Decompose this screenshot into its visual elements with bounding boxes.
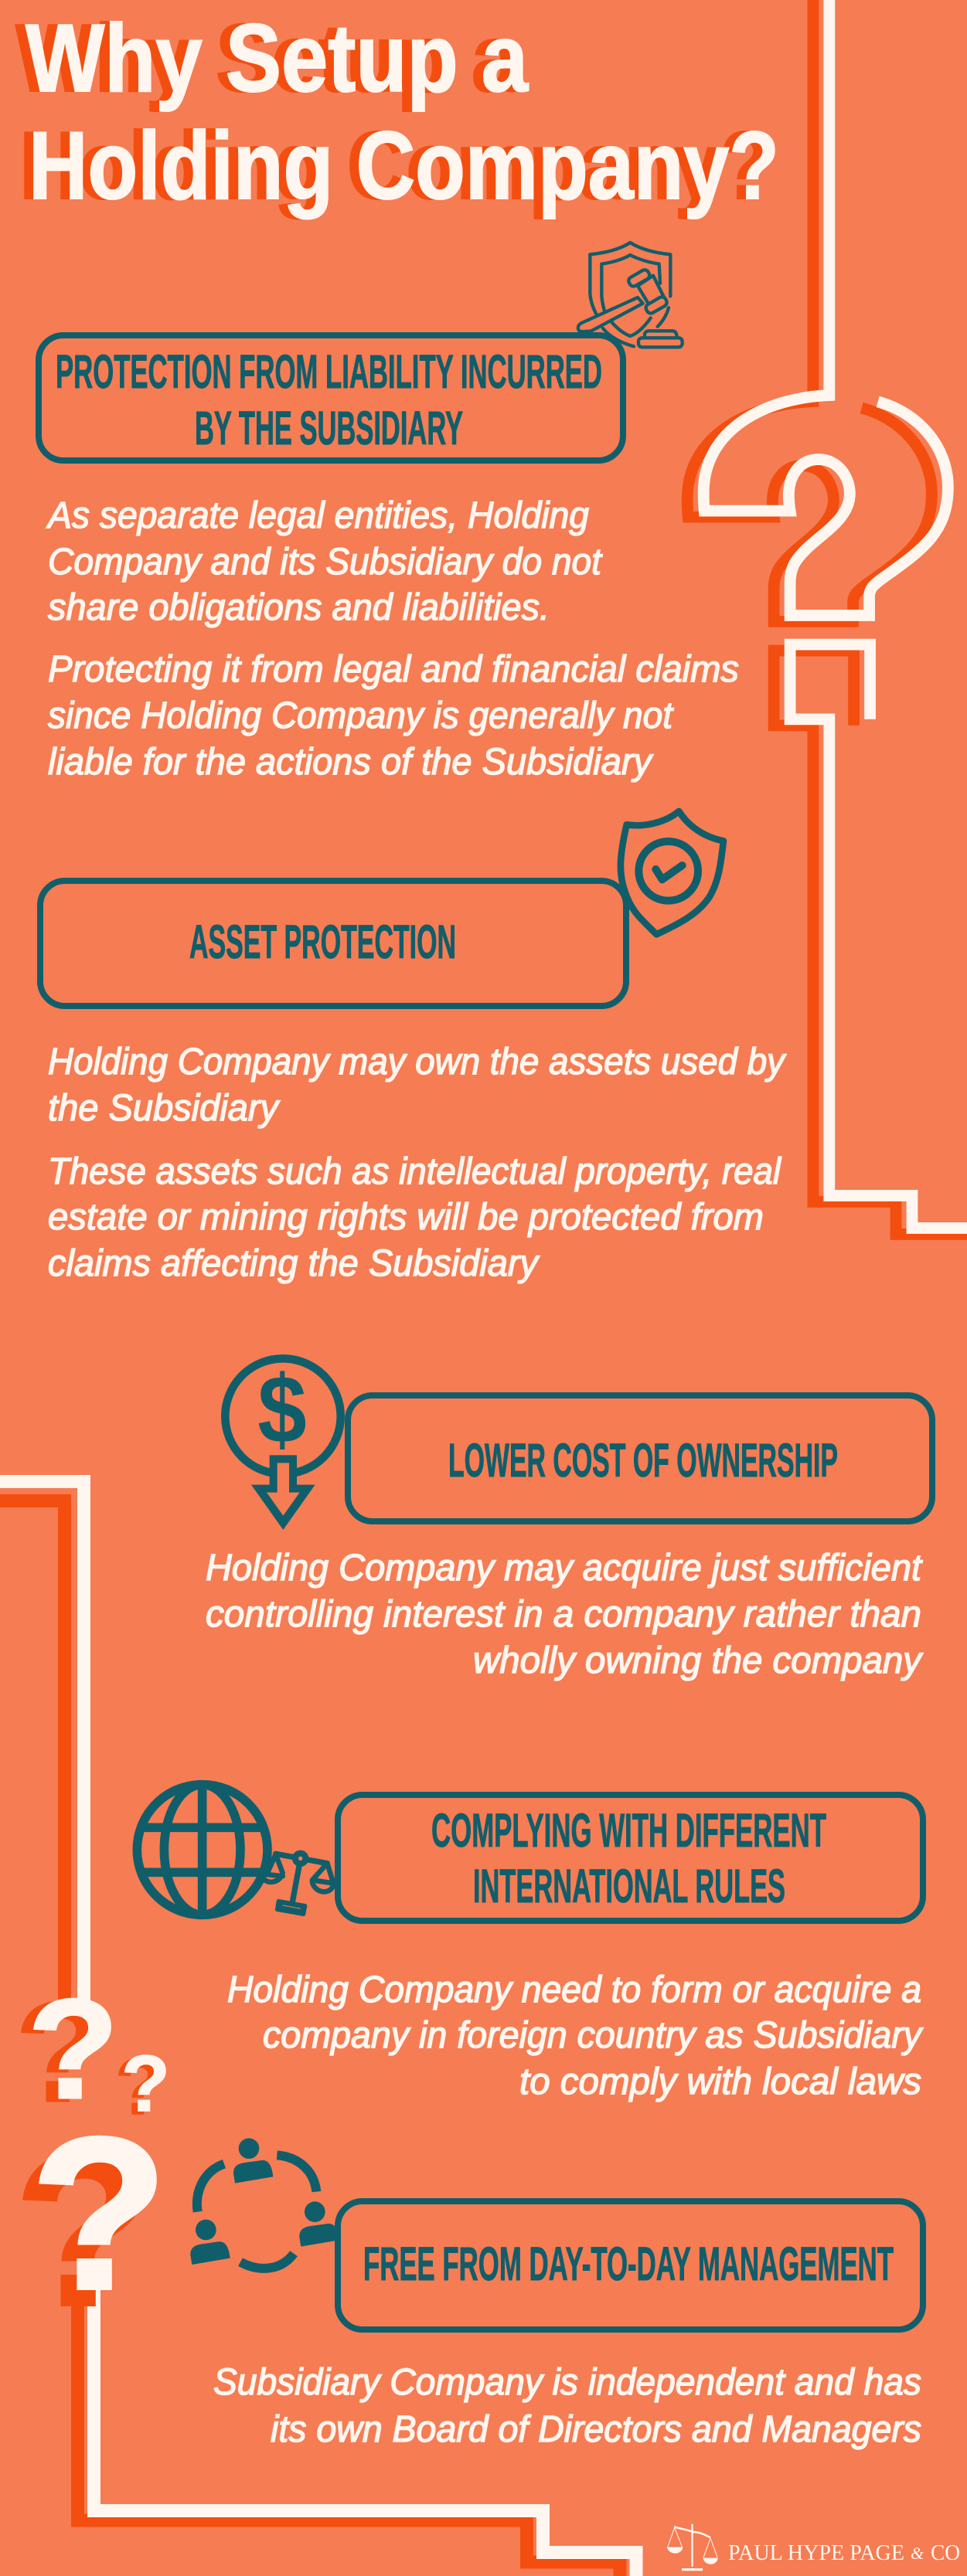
panel: complying with different international rules xyxy=(137,1785,924,2102)
text block: to comply with local laws xyxy=(519,2061,921,2102)
icon: large question mark: ? xyxy=(30,2092,169,2335)
title: Holding Company? xyxy=(19,113,770,219)
heading: ASSET PROTECTION xyxy=(189,916,456,968)
text block xyxy=(227,1969,924,2102)
icon: small question mark: ? xyxy=(121,2039,170,2128)
heading box xyxy=(338,2201,923,2330)
icon: three people in a circle xyxy=(190,2138,339,2268)
heading box xyxy=(348,1395,932,1521)
icon: small question mark: ? xyxy=(115,2042,164,2131)
text block: As separate legal entities, Holding xyxy=(46,495,589,536)
text block: share obligations and liabilities. xyxy=(48,587,550,628)
text block: These assets such as intellectual property, real xyxy=(48,1151,781,1192)
company name: PAUL HYPE PAGE xyxy=(728,2541,904,2565)
logo: Paul Hype Page & Co xyxy=(668,2524,960,2570)
heading box xyxy=(39,335,623,460)
text block: liable for the actions of the Subsidiary xyxy=(48,742,654,783)
icon: dollar coin with down arrow: $ xyxy=(257,1357,307,1463)
heading box xyxy=(338,1795,923,1921)
text block: Subsidiary Company is independent and has xyxy=(213,2362,921,2403)
text block: controlling interest in a company rather than xyxy=(206,1594,921,1635)
icon: shield with check xyxy=(621,811,724,934)
icon: shield and gavel xyxy=(578,243,683,347)
text block: the Subsidiary xyxy=(48,1088,281,1129)
text block xyxy=(46,495,739,783)
panel: protection from liability xyxy=(39,243,739,783)
connector line, lower left bottom segment xyxy=(77,2279,636,2576)
connector line with outlined question mark, top right xyxy=(687,0,967,1234)
text block xyxy=(213,2362,921,2450)
panel: asset protection xyxy=(40,811,787,1284)
text block xyxy=(206,1548,924,1681)
text block: its own Board of Directors and Managers xyxy=(271,2409,921,2450)
icon: scales of justice xyxy=(668,2524,717,2570)
company name: CO xyxy=(931,2541,960,2565)
connector line, lower left upper segment xyxy=(0,1482,83,2009)
panel: lower cost of ownership xyxy=(206,1357,932,1681)
panel: free from day-to-day management xyxy=(190,2138,923,2450)
icon: medium question mark: ? xyxy=(28,1969,118,2128)
text block: claims affecting the Subsidiary xyxy=(48,1243,540,1284)
text block: company in foreign country as Subsidiary xyxy=(263,2015,924,2056)
icon: balance scale xyxy=(264,1854,333,1914)
icon: large question mark: ? xyxy=(14,2108,152,2351)
icon: dollar coin with down arrow xyxy=(225,1357,341,1530)
text block: Company and its Subsidiary do not xyxy=(48,542,603,583)
text block: wholly owning the company xyxy=(473,1640,924,1681)
text block xyxy=(48,1042,787,1284)
title: Holding Company? xyxy=(29,113,779,219)
title: Why Setup a xyxy=(26,5,529,112)
title: Why Setup a xyxy=(15,5,519,112)
text block: Protecting it from legal and financial claims xyxy=(48,649,739,690)
heading xyxy=(431,1804,826,1912)
icon: globe xyxy=(137,1785,267,1915)
text block: estate or mining rights will be protected from xyxy=(48,1197,764,1238)
heading box xyxy=(40,881,626,1006)
icon: medium question mark: ? xyxy=(15,1973,106,2131)
heading xyxy=(56,345,602,454)
text block: Holding Company may own the assets used by xyxy=(48,1042,787,1082)
company name: & xyxy=(911,2544,924,2563)
heading: BY THE SUBSIDIARY xyxy=(195,402,463,454)
title xyxy=(15,5,779,219)
text block: since Holding Company is generally not xyxy=(48,695,674,736)
text block: Holding Company need to form or acquire a xyxy=(227,1969,921,2010)
text block: Holding Company may acquire just sufficient xyxy=(206,1548,923,1589)
